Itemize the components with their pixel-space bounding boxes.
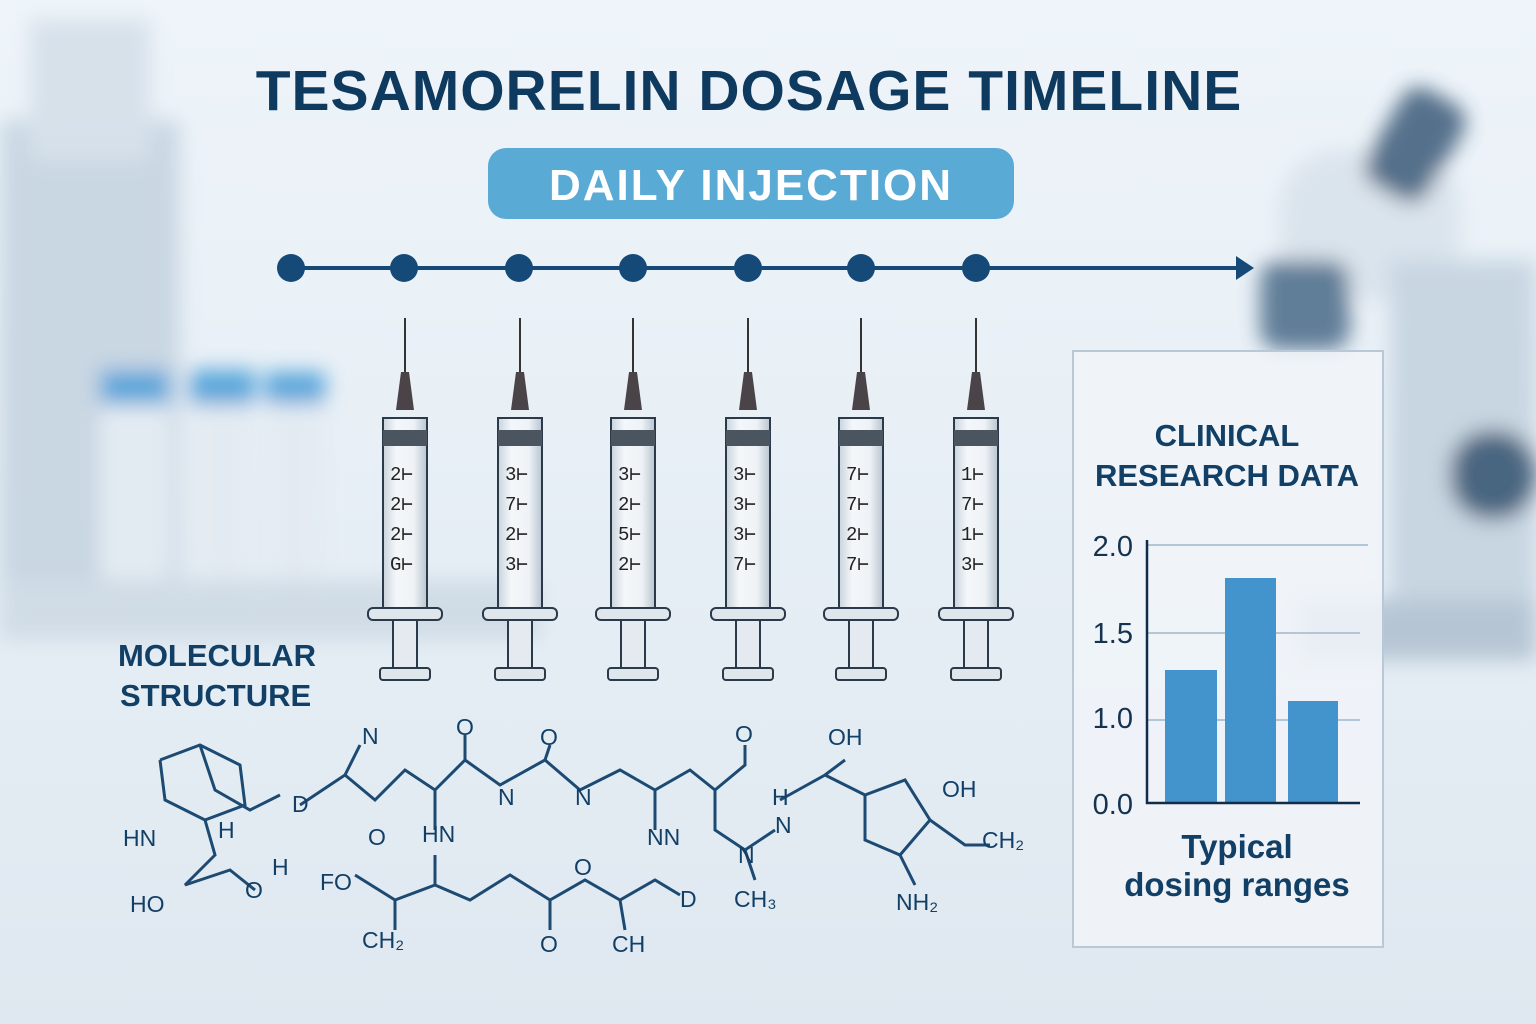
syringes: 3⊢ — [961, 554, 984, 576]
syringes: 7⊢ — [505, 494, 528, 516]
syringes: 3⊢ — [618, 464, 641, 486]
heading: molecular structure — [118, 638, 316, 713]
text: H — [272, 854, 289, 880]
text: CH — [612, 931, 645, 957]
syringes: 2⊢ — [505, 524, 528, 546]
text: O — [456, 714, 474, 740]
text: HN — [422, 821, 455, 847]
syringes: 7⊢ — [846, 554, 869, 576]
text: O — [540, 931, 558, 957]
text: O — [368, 824, 386, 850]
text: CH₃ — [734, 886, 777, 912]
bar chart: 1.5 — [1093, 618, 1133, 650]
text: N — [575, 784, 592, 810]
syringes: 2⊢ — [846, 524, 869, 546]
syringes: 2⊢ — [390, 524, 413, 546]
bar chart: 2.0 — [1093, 531, 1133, 563]
text: CH₂ — [982, 827, 1024, 853]
text: N — [775, 812, 792, 838]
text: HN — [123, 825, 156, 851]
text: OH — [942, 776, 976, 802]
panel heading — [1095, 418, 1359, 493]
bar chart — [1093, 531, 1368, 821]
syringes — [368, 318, 1013, 680]
text: H — [218, 817, 235, 843]
syringes: 3⊢ — [505, 464, 528, 486]
text: D — [680, 886, 697, 912]
text: O — [735, 721, 753, 747]
bar chart: 1.0 — [1093, 703, 1133, 735]
syringes: 1⊢ — [961, 524, 984, 546]
badge: daily injection: DAILY INJECTION — [549, 161, 953, 210]
badge: daily injection — [488, 148, 1014, 219]
text: O — [540, 724, 558, 750]
timeline arrow — [277, 254, 1254, 282]
heading: molecular structure: MOLECULAR — [118, 638, 316, 673]
syringes: 2⊢ — [618, 494, 641, 516]
text: N — [738, 842, 755, 868]
syringes: 7⊢ — [733, 554, 756, 576]
text: O — [245, 877, 263, 903]
syringes: 3⊢ — [733, 524, 756, 546]
syringes: 7⊢ — [846, 464, 869, 486]
heading: molecular structure: STRUCTURE — [120, 678, 311, 713]
syringes: 7⊢ — [961, 494, 984, 516]
syringes: 5⊢ — [618, 524, 641, 546]
text: D — [292, 791, 309, 817]
text: H — [772, 784, 789, 810]
syringes: 3⊢ — [733, 494, 756, 516]
syringes: 2⊢ — [390, 494, 413, 516]
syringes: G⊢ — [390, 554, 413, 576]
bar chart: 0.0 — [1093, 789, 1133, 821]
panel heading: RESEARCH DATA — [1095, 458, 1359, 493]
text: FO — [320, 869, 352, 895]
panel heading: CLINICAL — [1155, 418, 1299, 453]
text: CH₂ — [362, 927, 404, 953]
text: NN — [647, 824, 680, 850]
text: O — [574, 854, 592, 880]
chart caption: Typical — [1181, 828, 1293, 865]
text: HO — [130, 891, 164, 917]
panel: clinical research data — [1073, 351, 1383, 947]
text: NH₂ — [896, 889, 938, 915]
text: OH — [828, 724, 862, 750]
syringes: 1⊢ — [961, 464, 984, 486]
chart caption: dosing ranges — [1124, 866, 1350, 903]
syringes: 7⊢ — [846, 494, 869, 516]
text: N — [498, 784, 515, 810]
background: blurred lab — [0, 20, 1536, 660]
molecular structure diagram — [160, 735, 990, 930]
title: TESAMORELIN DOSAGE TIMELINE — [256, 59, 1242, 123]
syringes: 2⊢ — [618, 554, 641, 576]
chart caption — [1124, 828, 1350, 903]
syringes: 3⊢ — [733, 464, 756, 486]
syringes: 2⊢ — [390, 464, 413, 486]
syringes: 3⊢ — [505, 554, 528, 576]
text: N — [362, 723, 379, 749]
